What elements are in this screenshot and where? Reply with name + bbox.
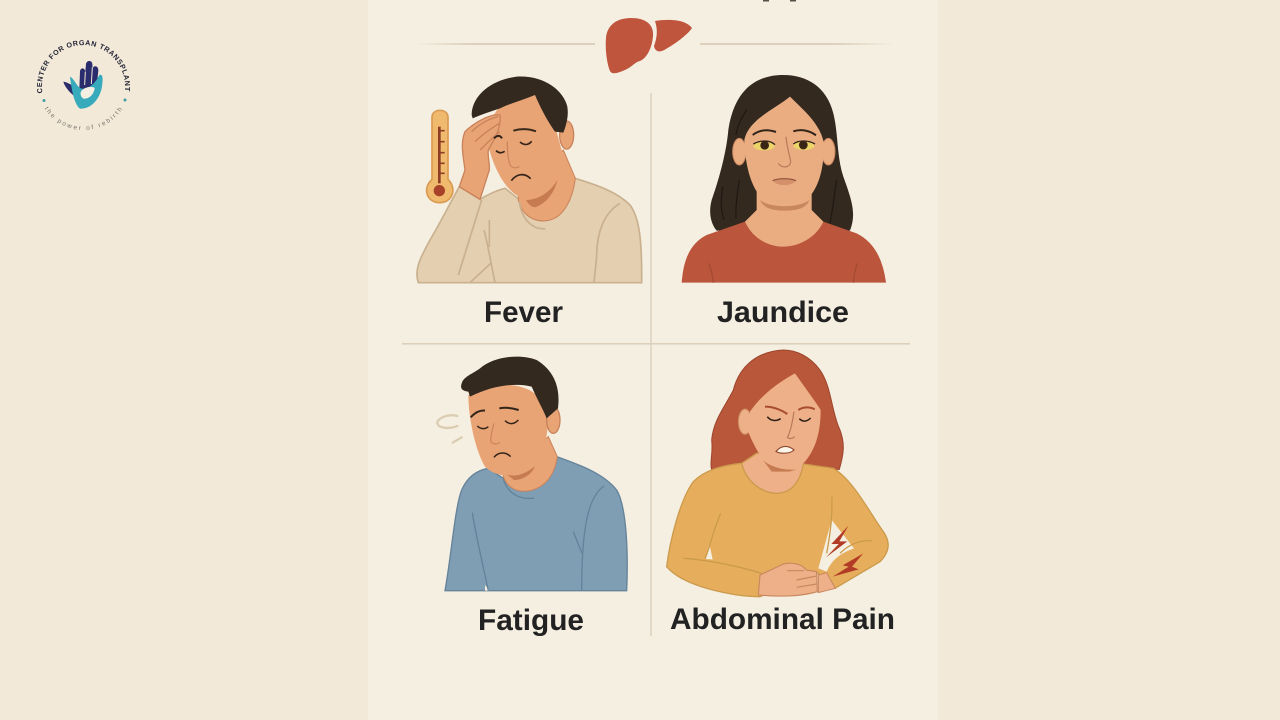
icon: dizzy marks	[437, 415, 462, 443]
illustration: tired man	[437, 357, 627, 591]
icon: hand	[63, 61, 103, 109]
label: Abdominal Pain: Abdominal Pain	[670, 603, 895, 636]
logo dots	[42, 98, 126, 102]
illustration: woman with jaundice	[682, 75, 886, 283]
logo: Center for Organ Transplant	[36, 40, 130, 130]
icon: thermometer	[427, 110, 453, 203]
panel: fever	[417, 77, 642, 329]
logo tagline: the power of rebirth	[45, 106, 122, 130]
illustration: woman with abdominal pain	[667, 350, 888, 597]
illustration: man with fever	[417, 77, 642, 283]
label: Fatigue: Fatigue	[478, 604, 584, 637]
cropped title remnants	[763, 0, 796, 2]
panel: central card	[368, 0, 938, 720]
logo ring text: CENTER FOR ORGAN TRANSPLANT	[36, 40, 130, 94]
panel: abdominal pain	[667, 350, 895, 636]
panel: jaundice	[682, 75, 886, 329]
label: Fever: Fever	[484, 296, 563, 329]
icon: liver	[606, 18, 692, 73]
panel: fatigue	[437, 357, 627, 637]
label: Jaundice: Jaundice	[717, 296, 849, 329]
icon: pain bolts	[826, 525, 863, 577]
